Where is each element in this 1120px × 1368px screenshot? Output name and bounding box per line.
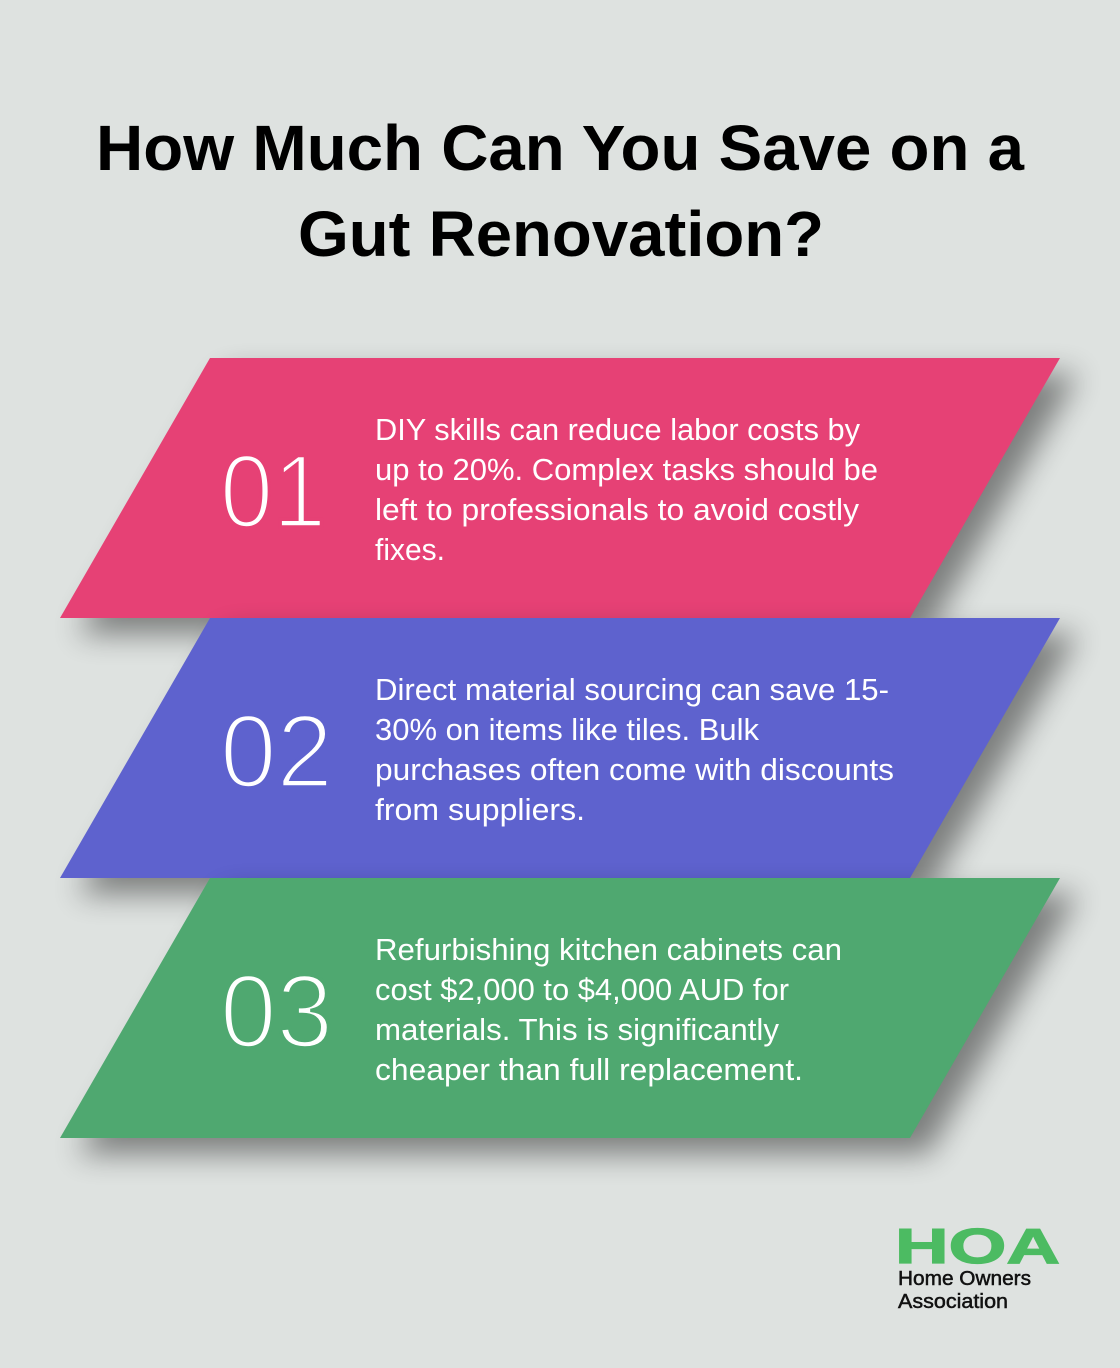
logo: HOA Home Owners Association: Home Owners (898, 1268, 1031, 1290)
logo: HOA Home Owners Association: Association (898, 1291, 1008, 1313)
logo: HOA Home Owners Association: HOA (895, 1220, 1060, 1274)
text: step 01 description: left to professionals to avoid costly (375, 493, 860, 527)
title: Gut Renovation? (298, 198, 824, 270)
panel: step 01 labor costs (60, 358, 1078, 634)
text: step 01 description: DIY skills can reduce labor costs by (375, 413, 861, 447)
panel: step 03 cabinet refurbishing (60, 878, 1078, 1154)
text: step 02 description: Direct material sourcing can save 15- (375, 673, 889, 707)
number 01: 01 (220, 434, 326, 550)
text: step 02 description (375, 673, 894, 827)
panel: step 02 material sourcing (60, 618, 1078, 894)
title (96, 112, 1024, 270)
text: step 03 description: cost $2,000 to $4,000 AUD for (375, 973, 789, 1007)
logo: HOA Home Owners Association (895, 1220, 1060, 1313)
number 02: 02 (220, 694, 333, 810)
text: step 01 description: fixes. (375, 533, 445, 567)
text: step 03 description (375, 933, 842, 1087)
text: step 01 description: up to 20%. Complex tasks should be (375, 453, 878, 487)
text: step 03 description: materials. This is significantly (375, 1013, 780, 1047)
text: step 02 description: from suppliers. (375, 793, 585, 827)
text: step 03 description: cheaper than full replacement. (375, 1053, 803, 1087)
title: How Much Can You Save on a (96, 112, 1024, 184)
text: step 01 description (375, 413, 878, 567)
text: step 02 description: purchases often come with discounts (375, 753, 894, 787)
text: step 03 description: Refurbishing kitchen cabinets can (375, 933, 842, 967)
text: step 02 description: 30% on items like tiles. Bulk (375, 713, 760, 747)
number 03: 03 (220, 954, 333, 1070)
